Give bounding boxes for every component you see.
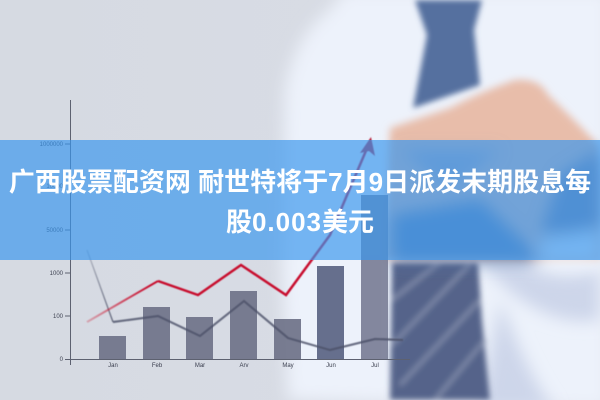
y axis ticks and labels <box>40 142 70 363</box>
hand and tie shadow behind banner <box>392 150 600 262</box>
month labels: Arv <box>240 363 248 369</box>
shirt <box>282 0 600 400</box>
y axis ticks and labels: 50000 <box>46 228 64 234</box>
bars <box>99 195 388 359</box>
chart <box>40 100 410 369</box>
title: 股0.003美元 <box>226 207 374 237</box>
month labels: May <box>282 363 294 369</box>
y axis ticks and labels: 1000 <box>50 271 64 277</box>
tie lower <box>390 262 490 400</box>
gray trend line <box>87 250 403 350</box>
month labels: Jul <box>371 363 379 369</box>
month labels: Jan <box>108 363 118 369</box>
y axis ticks and labels: 0 <box>60 357 64 363</box>
tie upper <box>413 0 482 108</box>
title: 广西股票配资网 耐世特将于7月9日派发末期股息每 <box>9 167 591 197</box>
y axis ticks and labels: 1000000 <box>40 142 64 148</box>
shirt shading <box>480 262 600 400</box>
month labels <box>108 363 379 369</box>
banner <box>0 140 600 260</box>
red trend line with arrow <box>87 137 375 322</box>
y axis ticks and labels: 100 <box>53 314 64 320</box>
axes <box>65 100 410 365</box>
y axis ticks and labels: 10000 <box>46 184 64 190</box>
month labels: Jun <box>326 363 336 369</box>
title <box>9 167 591 237</box>
month labels: Feb <box>152 363 163 369</box>
hand <box>385 80 600 260</box>
month labels: Mar <box>195 363 205 369</box>
